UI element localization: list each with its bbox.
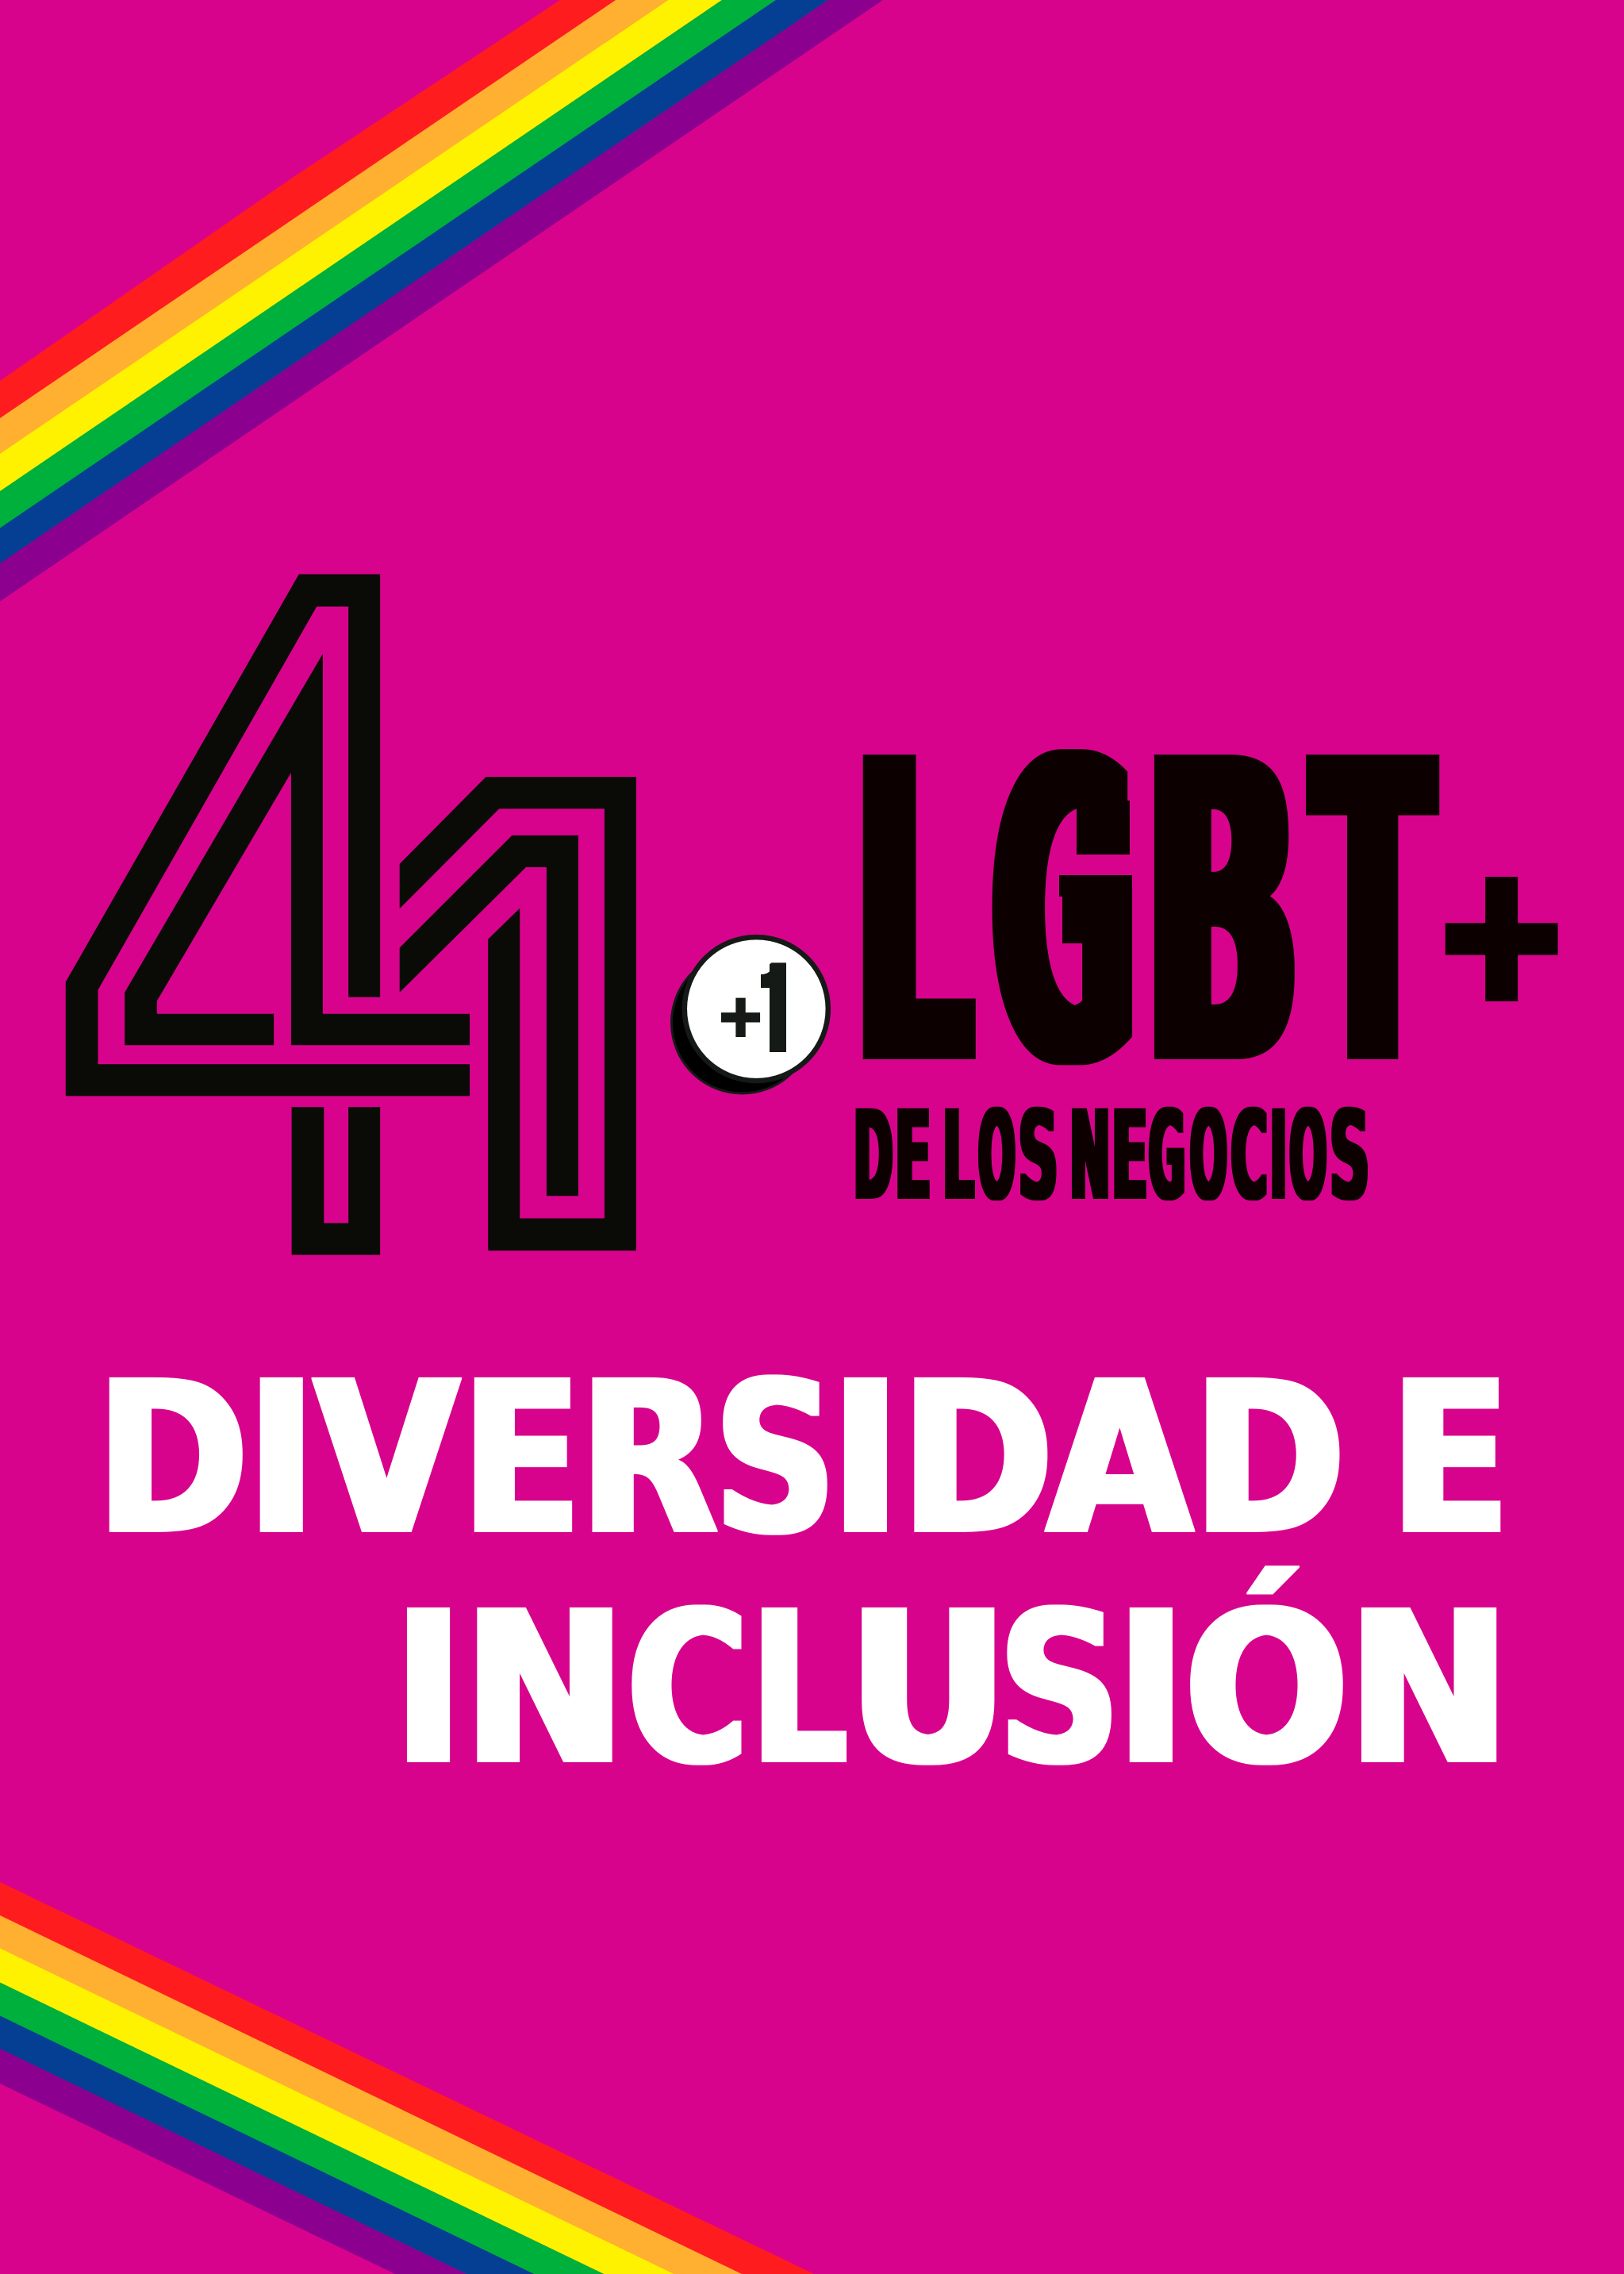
subtitle: C xyxy=(1231,1085,1268,1227)
heading line 1: E xyxy=(463,1337,581,1581)
subtitle: S xyxy=(1019,1085,1058,1227)
heading line 1: E xyxy=(1391,1337,1509,1581)
subtitle: I xyxy=(1270,1085,1287,1227)
LGBT wordmark: L xyxy=(856,673,971,1157)
badge number one: 1 xyxy=(744,938,808,1080)
subtitle xyxy=(854,1085,1369,1227)
heading line 1: I xyxy=(831,1337,900,1581)
subtitle: E xyxy=(1111,1085,1148,1227)
main heading xyxy=(97,1337,1511,1811)
poster: T xyxy=(1315,673,1432,1157)
heading line 2: C xyxy=(628,1567,748,1811)
top rainbow stripes xyxy=(0,0,883,601)
subtitle: D xyxy=(854,1085,893,1227)
heading line 2: Ó xyxy=(1184,1565,1349,1811)
numeral 1 xyxy=(400,777,636,1250)
bottom rainbow stripes xyxy=(0,1882,814,2274)
heading line 2: U xyxy=(847,1567,1008,1811)
logo numerals 41 xyxy=(66,574,636,1255)
heading line 1: D xyxy=(1193,1337,1346,1581)
badge plus sign: + xyxy=(716,982,765,1049)
heading line 1: D xyxy=(901,1337,1053,1581)
heading line 1: I xyxy=(247,1337,316,1581)
heading line 2: S xyxy=(999,1567,1119,1811)
subtitle: N xyxy=(1069,1085,1110,1227)
heading line 1: D xyxy=(97,1337,248,1581)
subtitle: O xyxy=(1290,1085,1326,1227)
LGBT plus sign: + xyxy=(1436,829,1568,1039)
subtitle: L xyxy=(943,1085,974,1227)
subtitle: E xyxy=(895,1085,931,1227)
heading line 2: I xyxy=(394,1567,463,1811)
subtitle: O xyxy=(978,1085,1015,1227)
heading line 1: V xyxy=(314,1337,460,1581)
LGBT wordmark: G xyxy=(993,673,1135,1157)
numeral 4 xyxy=(66,574,470,1255)
subtitle: G xyxy=(1149,1085,1185,1227)
heading line 2: N xyxy=(463,1567,626,1811)
heading line 2: I xyxy=(1116,1567,1186,1811)
subtitle: O xyxy=(1190,1085,1227,1227)
LGBT wordmark xyxy=(856,673,1432,1157)
heading line 1: S xyxy=(715,1337,835,1581)
LGBT wordmark: B xyxy=(1146,673,1300,1157)
heading line 2: L xyxy=(752,1567,847,1811)
heading line 1: R xyxy=(580,1337,717,1581)
+1 badge xyxy=(671,937,828,1093)
poster: S xyxy=(1330,1085,1369,1227)
heading line 2: N xyxy=(1347,1567,1511,1811)
heading line 1: A xyxy=(1047,1337,1193,1581)
